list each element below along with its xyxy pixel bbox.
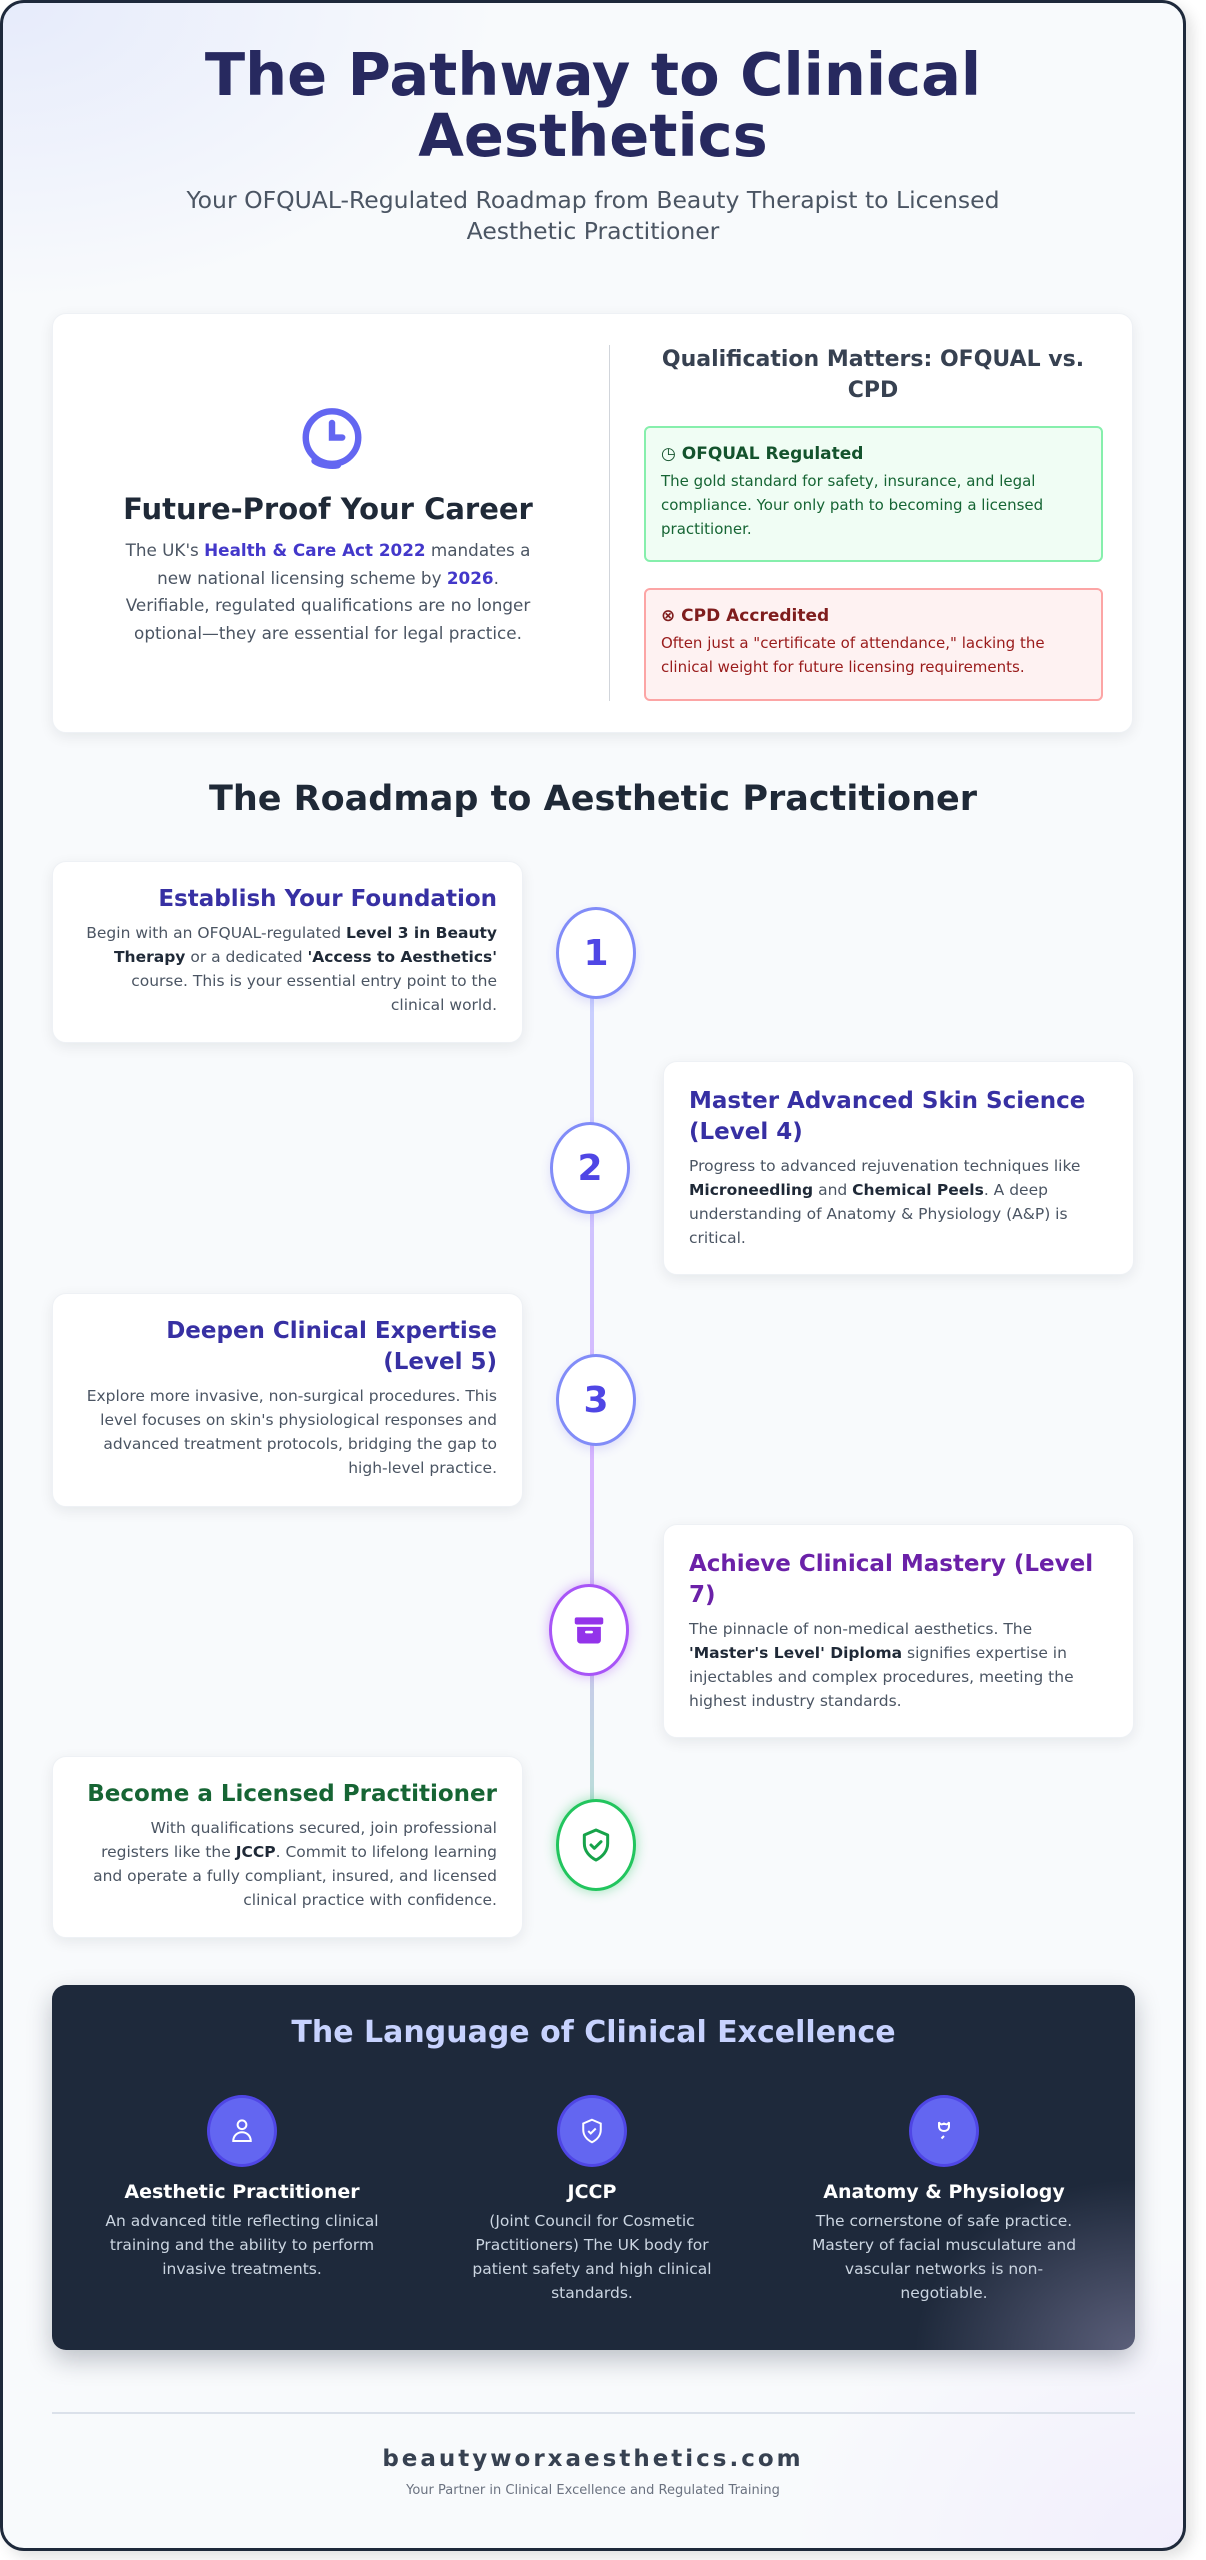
subtitle [186, 186, 1000, 245]
title [205, 40, 981, 170]
term: JCCP: JCCP [568, 2181, 616, 2203]
box: CPD [644, 588, 1103, 701]
panel: glossary [52, 1985, 1135, 2350]
footer: website: beautyworxaesthetics.com [382, 2446, 804, 2472]
title: The Pathway to Clinical [205, 40, 981, 109]
step 4 card: Achieve Clinical Mastery (Level 7) [689, 1551, 1093, 1608]
step 1 marker [556, 907, 636, 999]
term: JCCP [472, 2095, 712, 2302]
step 3 card: (Level 5) [383, 1349, 497, 1375]
heading: qualification matters: CPD [848, 378, 898, 403]
footer: tagline: Your Partner in Clinical Excellence and Regulated Training [406, 2483, 780, 2498]
subtitle: Aesthetic Practitioner [467, 217, 719, 245]
term: anatomy [812, 2095, 1076, 2302]
step 1 card [52, 861, 523, 1043]
step 4 card [663, 1524, 1134, 1738]
box: OFQUAL [644, 426, 1103, 562]
box: CPD: ⊗ CPD Accredited [661, 606, 829, 626]
icon: clock [302, 408, 362, 469]
step 5 card [52, 1756, 523, 1938]
heading: future-proof: Future-Proof Your Career [123, 492, 533, 526]
step 2 card [663, 1061, 1134, 1275]
heading: roadmap: The Roadmap to Aesthetic Practitioner [209, 779, 977, 819]
term: anatomy: Anatomy & Physiology [823, 2181, 1065, 2203]
title: Aesthetics [418, 101, 768, 170]
step 3 card: Explore more invasive, non-surgical procedures. This level focuses on skin's physiological responses and advanced treatment protocols, bridging the gap to high-level practice. [87, 1387, 497, 1477]
subtitle: Your OFQUAL-Regulated Roadmap from Beauty Therapist to Licensed [186, 186, 1000, 214]
box: OFQUAL: The gold standard for safety, insurance, and legal compliance. Your only path to becoming a licensed practitioner. [661, 472, 1043, 538]
term: anatomy: The cornerstone of safe practice. Mastery of facial musculature and vascular networks is non-negotiable. [812, 2212, 1076, 2302]
step 3 card: Deepen Clinical Expertise [166, 1318, 497, 1344]
step 4 marker: archive icon [549, 1584, 629, 1676]
step 3 card [52, 1293, 523, 1507]
step 1 card: Establish Your Foundation [158, 886, 497, 912]
heading: qualification matters: Qualification Matters: OFQUAL vs. [662, 347, 1084, 372]
timeline line [590, 960, 594, 1850]
term: aesthetic practitioner [105, 2095, 379, 2278]
term: aesthetic practitioner: Aesthetic Practitioner [124, 2181, 360, 2203]
term: JCCP: (Joint Council for Cosmetic Practitioners) The UK body for patient safety and high clinical standards. [472, 2212, 712, 2302]
term: aesthetic practitioner: An advanced title reflecting clinical training and the ability to perform invasive treatments. [105, 2212, 379, 2278]
step 4 card: The pinnacle of non-medical aesthetics. The 'Master's Level' Diploma signifies expertise in injectables and complex procedures, meeting the highest industry standards. [689, 1620, 1074, 1710]
step 5 marker: shield icon [556, 1799, 636, 1891]
step 1 marker: 1 [583, 932, 609, 974]
step 3 marker [556, 1354, 636, 1446]
step 5 card: Become a Licensed Practitioner [87, 1781, 497, 1807]
box: OFQUAL: ◷ OFQUAL Regulated [661, 444, 863, 464]
step 2 marker [550, 1122, 630, 1214]
step 3 marker: 3 [583, 1380, 609, 1420]
panel: intro card [52, 313, 1133, 733]
text: licensing: The UK's Health & Care Act 2022 mandates a new national licensing scheme by 2026. Verifiable, regulated qualifications are no longer optional—they are essential for legal practice. [126, 540, 530, 642]
step 2 marker: 2 [577, 1148, 603, 1188]
step 2 card: Progress to advanced rejuvenation techniques like Microneedling and Chemical Peels. A deep understanding of Anatomy & Physiology (A&P) is critical. [689, 1157, 1080, 1247]
step 5 card: With qualifications secured, join professional registers like the JCCP. Commit to lifelong learning and operate a fully compliant, insured, and licensed clinical practice with confidence. [93, 1819, 497, 1909]
heading: glossary: The Language of Clinical Excellence [291, 2015, 896, 2050]
heading: qualification matters [662, 347, 1084, 403]
step 1 card: Begin with an OFQUAL-regulated Level 3 in Beauty Therapy or a dedicated 'Access to Aesthetics' course. This is your essential entry point to the clinical world. [86, 924, 497, 1014]
box: CPD: Often just a "certificate of attendance," lacking the clinical weight for future licensing requirements. [661, 634, 1045, 676]
step 2 card: Master Advanced Skin Science (Level 4) [689, 1088, 1085, 1145]
